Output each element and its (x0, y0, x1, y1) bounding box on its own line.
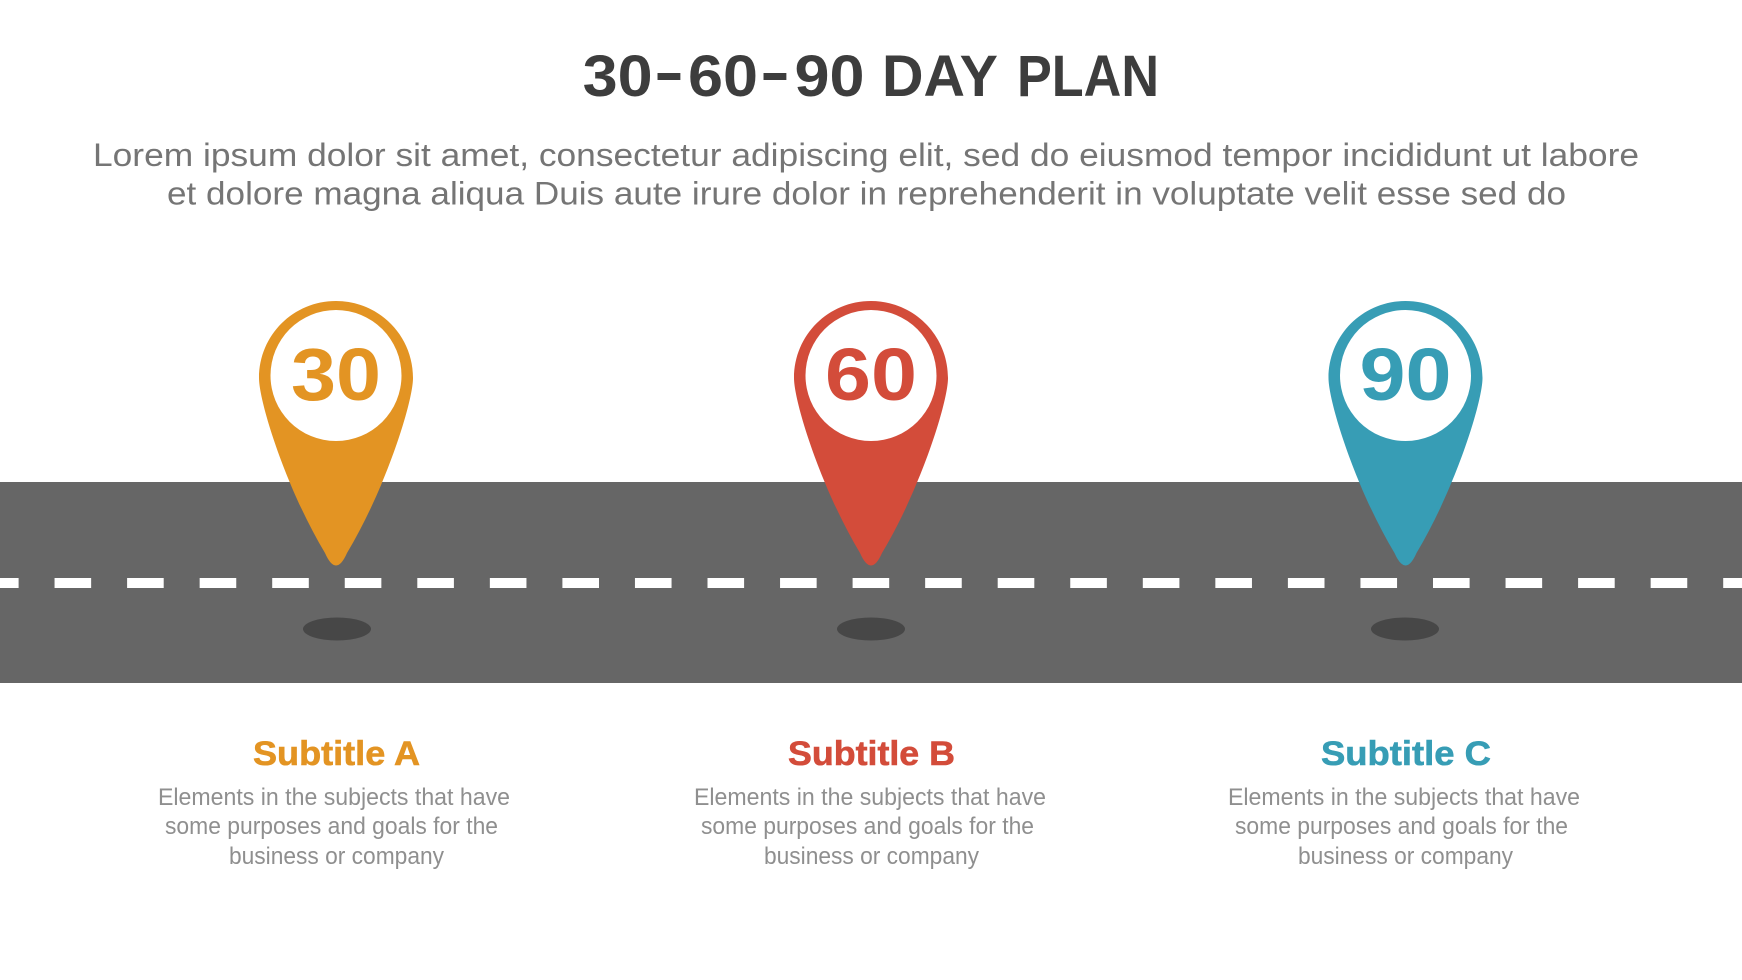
column: Subtitle B (694, 735, 1046, 870)
pin: 90 days (1328, 301, 1482, 566)
intro text (93, 137, 1639, 212)
title: PLAN (1017, 44, 1159, 109)
marker shadow: 90 (1371, 618, 1439, 640)
marker shadow: 30 (303, 618, 371, 640)
intro text: et dolore magna aliqua Duis aute irure dolor in reprehenderit in voluptate velit esse sed do (167, 176, 1566, 212)
column: Subtitle C: Subtitle C (1321, 735, 1491, 773)
column: Subtitle B: some purposes and goals for the (701, 813, 1034, 840)
column: Subtitle A: Subtitle A (253, 735, 420, 773)
pin: 30 days (259, 301, 413, 566)
pin: 90 days: 90 (1360, 333, 1452, 416)
title: 90 (794, 44, 864, 109)
column: Subtitle A (158, 735, 510, 870)
column: Subtitle C: Elements in the subjects that have (1228, 784, 1580, 811)
pin: 30 days: 30 (291, 333, 381, 416)
column: Subtitle A: business or company (229, 843, 444, 870)
title: DAY (882, 44, 998, 109)
title: - (654, 40, 684, 104)
title: - (760, 40, 790, 104)
column: Subtitle B: Subtitle B (788, 735, 955, 773)
column: Subtitle A: Elements in the subjects that have (158, 784, 510, 811)
column: Subtitle A: some purposes and goals for the (165, 813, 498, 840)
title (583, 40, 1159, 109)
column: Subtitle C (1228, 735, 1580, 870)
intro text: Lorem ipsum dolor sit amet, consectetur adipiscing elit, sed do eiusmod tempor incididunt ut labore (93, 137, 1639, 173)
pin: 60 days (794, 301, 948, 566)
title: 30 (583, 44, 653, 109)
column: Subtitle B: business or company (764, 843, 979, 870)
column: Subtitle C: business or company (1298, 843, 1513, 870)
marker shadow: 60 (837, 618, 905, 640)
road (0, 482, 1742, 683)
column: Subtitle C: some purposes and goals for the (1235, 813, 1568, 840)
title: 60 (688, 44, 758, 109)
pin: 60 days: 60 (825, 333, 917, 416)
column: Subtitle B: Elements in the subjects that have (694, 784, 1046, 811)
